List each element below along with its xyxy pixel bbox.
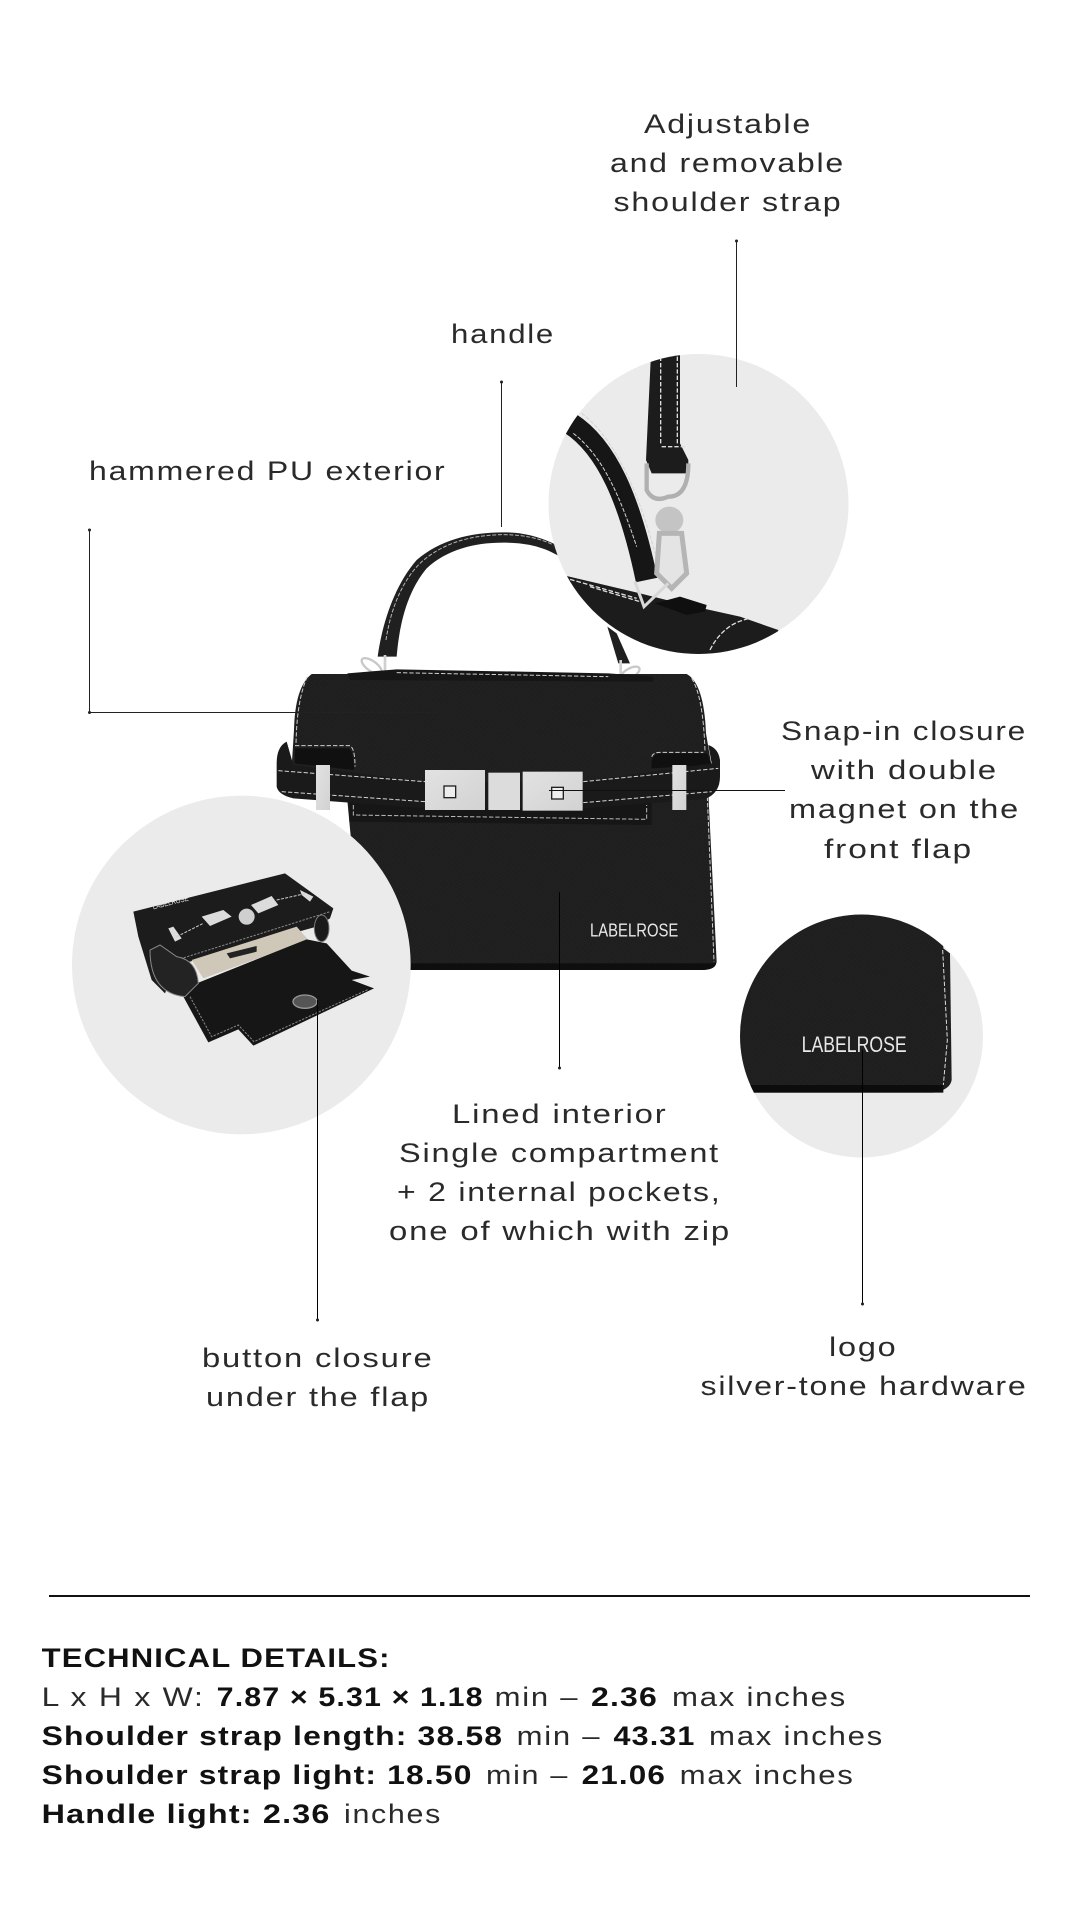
dimensions line: min – [495, 1682, 579, 1712]
shoulder strap light line: 21.06 [582, 1760, 666, 1790]
open flap [183, 939, 374, 1046]
leader line: button closure [316, 1000, 319, 1322]
bag lower body [347, 793, 717, 970]
leader line: hammered exterior [88, 528, 437, 714]
label: snap-in closure: Snap-in closure [781, 716, 1027, 746]
detail circle: bag open with button closure [72, 796, 411, 1134]
bag logo: LABELROSE [590, 920, 678, 941]
dimensions line: 7.87 × 5.31 × 1.18 [217, 1682, 484, 1712]
top strap of flap [347, 669, 653, 682]
leader line: logo [861, 1050, 864, 1306]
label: logo and hardware: silver-tone hardware [700, 1371, 1028, 1401]
leader line: lined interior [558, 892, 561, 1070]
label: adjustable shoulder strap: and removable [610, 148, 845, 178]
bag flap [292, 674, 712, 800]
label: logo and hardware: logo [829, 1332, 898, 1362]
handle light line: Handle light: 2.36 [42, 1799, 331, 1829]
shoulder strap light line: min – [486, 1760, 569, 1790]
leader line: shoulder strap [735, 240, 738, 387]
label: logo and hardware [700, 1332, 1028, 1401]
shoulder strap length line: Shoulder strap length: 38.58 [42, 1721, 503, 1751]
dimensions line [42, 1682, 847, 1712]
label: lined interior [389, 1099, 731, 1246]
shoulder strap length line: min – [517, 1721, 601, 1751]
handle in circle [570, 423, 647, 580]
magnetic button [293, 995, 317, 1008]
label: adjustable shoulder strap: shoulder strap [614, 187, 842, 217]
small tab [655, 597, 707, 615]
leather corner [740, 914, 952, 1093]
label: button closure: button closure [202, 1343, 434, 1373]
leader line: snap-in closure [549, 790, 785, 792]
label: lined interior: Lined interior [452, 1099, 668, 1129]
label: adjustable shoulder strap [610, 109, 845, 217]
shoulder strap light line: Shoulder strap light: 18.50 [42, 1760, 473, 1790]
flap side cut-outs [295, 748, 712, 770]
open bag hardware [168, 890, 313, 942]
side gussets [150, 915, 329, 997]
handle light line [42, 1799, 442, 1829]
technical details heading: TECHNICAL DETAILS: [42, 1643, 391, 1673]
label: lined interior: one of which with zip [389, 1216, 731, 1246]
close-up logo: LABELROSE [802, 1032, 907, 1057]
shoulder strap length line [42, 1721, 884, 1751]
dimensions line: 2.36 [591, 1682, 658, 1712]
lower tab under belt [349, 797, 652, 825]
technical details [42, 1643, 884, 1829]
label: button closure [202, 1343, 434, 1412]
open bag upper part [133, 873, 333, 993]
label: snap-in closure [781, 716, 1027, 864]
label: snap-in closure: magnet on the [789, 794, 1020, 824]
label: lined interior: + 2 internal pockets, [397, 1177, 722, 1207]
label: handle: handle [451, 319, 555, 349]
beige interior lining [192, 927, 308, 978]
front belt [277, 742, 720, 808]
label: button closure: under the flap [206, 1382, 430, 1412]
detail circle: shoulder strap clasp [548, 353, 848, 660]
belt loops [316, 765, 686, 810]
flap stitching [295, 673, 714, 962]
label: hammered PU exterior: hammered PU exterior [89, 456, 446, 486]
bag handle [359, 532, 642, 683]
shoulder strap length line: 43.31 [614, 1721, 696, 1751]
shoulder strap length line: max inches [709, 1721, 884, 1751]
label: adjustable shoulder strap: Adjustable [644, 109, 812, 139]
small printed logo: LABELROSE [152, 894, 189, 911]
divider line [49, 1595, 1030, 1597]
label: snap-in closure: with double [810, 755, 998, 785]
main product: black handbag [277, 532, 720, 970]
leader line: handle [500, 380, 503, 527]
shoulder strap light line [42, 1760, 855, 1790]
swivel clasp [647, 463, 688, 499]
handle light line: inches [344, 1799, 442, 1829]
label: snap-in closure: front flap [824, 834, 973, 864]
label: lined interior: Single compartment [399, 1138, 720, 1168]
shoulder strap light line: max inches [680, 1760, 855, 1790]
bag top in circle [567, 576, 778, 660]
strap in circle [646, 353, 688, 473]
dimensions line: L x H x W: [42, 1682, 205, 1712]
detail circle: logo close-up [730, 900, 983, 1158]
snap-in closure plates [425, 770, 583, 811]
dimensions line: max inches [672, 1682, 847, 1712]
